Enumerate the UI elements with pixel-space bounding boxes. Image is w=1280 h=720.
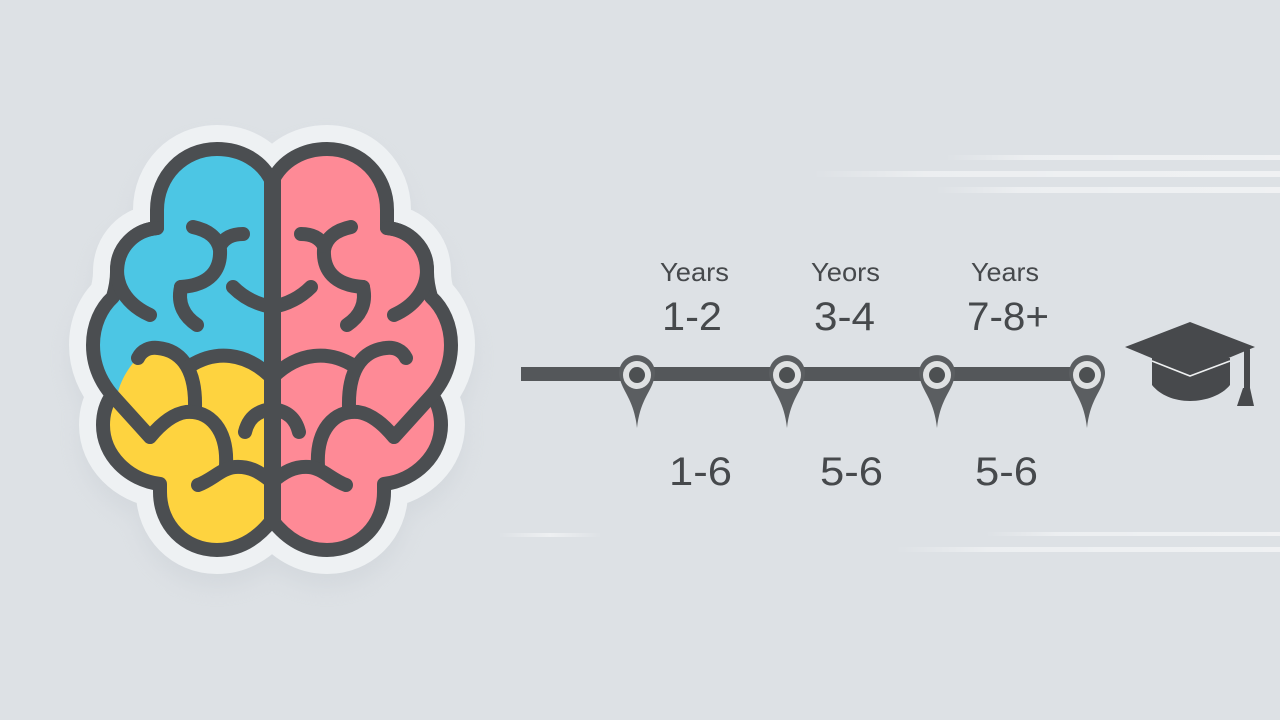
label: years 7-8+ (967, 257, 1049, 339)
pin 2 (769, 355, 805, 428)
label: years 1-2: Years (660, 257, 729, 287)
label: 1-6: 1-6 (669, 450, 732, 494)
sticker shadow (93, 163, 451, 564)
label: years 3-4 (811, 257, 880, 339)
label: years 7-8+: 7-8+ (967, 295, 1049, 339)
left brain folds (93, 149, 272, 550)
brain midline (264, 178, 281, 526)
icon: brain sticker (85, 149, 451, 564)
pin 4 (1069, 355, 1105, 428)
left hemisphere yellow lobe (110, 354, 264, 543)
pin 3 (919, 355, 955, 428)
right hemisphere pink (272, 149, 451, 550)
label: 5-6 right: 5-6 (975, 450, 1038, 494)
left hemisphere blue (93, 149, 272, 550)
icon: graduation cap (1125, 322, 1255, 406)
timeline (521, 355, 1105, 428)
right brain folds (272, 149, 451, 550)
pin 1 (619, 355, 655, 428)
label: years 3-4: Yeors (811, 257, 880, 287)
label: years 1-2: 1-2 (662, 295, 722, 339)
timeline bar (521, 367, 1087, 381)
background streaks (498, 155, 1280, 552)
label: years 7-8+: Years (971, 257, 1039, 287)
sticker white border (93, 149, 451, 550)
label: years 1-2 (660, 257, 729, 339)
label: years 3-4: 3-4 (814, 295, 875, 339)
label: 5-6: 5-6 (820, 450, 883, 494)
